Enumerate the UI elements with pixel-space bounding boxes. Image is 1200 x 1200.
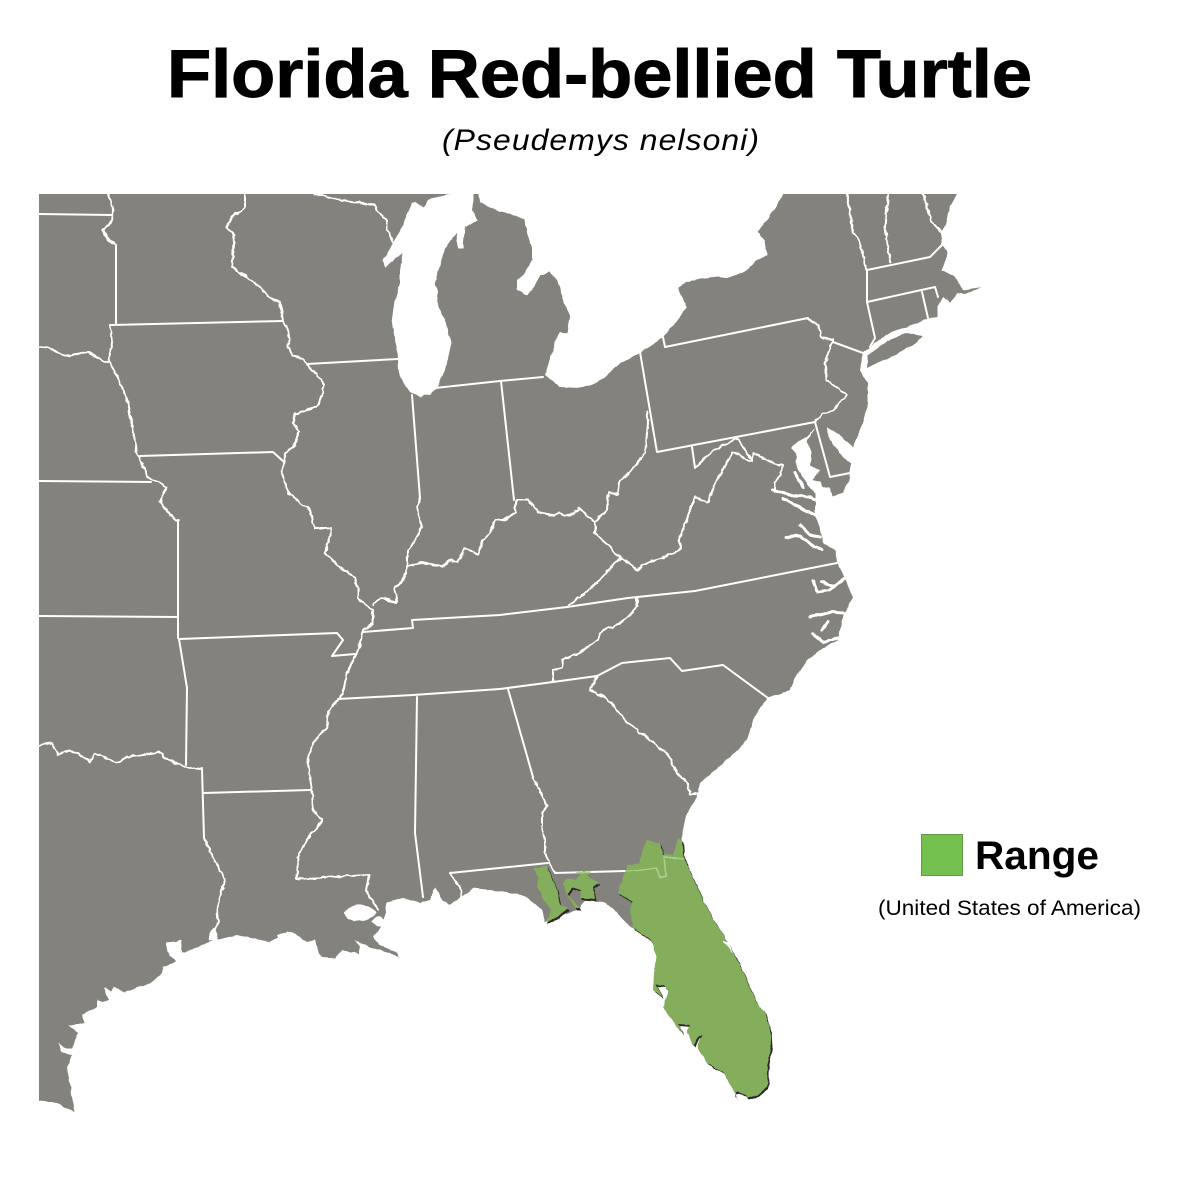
water: lakes, bays and sounds (209, 473, 845, 941)
straight state lines (39, 214, 942, 897)
subtitle: scientific name: (Pseudemys nelsoni) (442, 124, 760, 157)
map: eastern United States (30, 185, 982, 1112)
land mass (30, 185, 982, 1112)
legend (878, 834, 1141, 920)
title: Florida Red-bellied Turtle (167, 36, 1032, 112)
legend label: Range (975, 834, 1099, 878)
Georgia-Florida border within range (576, 857, 685, 877)
Indian River lagoon (723, 940, 733, 953)
range: Florida and panhandle in green (534, 838, 772, 1100)
range fill (534, 838, 771, 1098)
legend swatch (922, 834, 962, 876)
state borders (39, 194, 942, 938)
range shadow (536, 840, 772, 1100)
river state lines (39, 194, 942, 938)
legend region note: (United States of America) (878, 897, 1141, 920)
